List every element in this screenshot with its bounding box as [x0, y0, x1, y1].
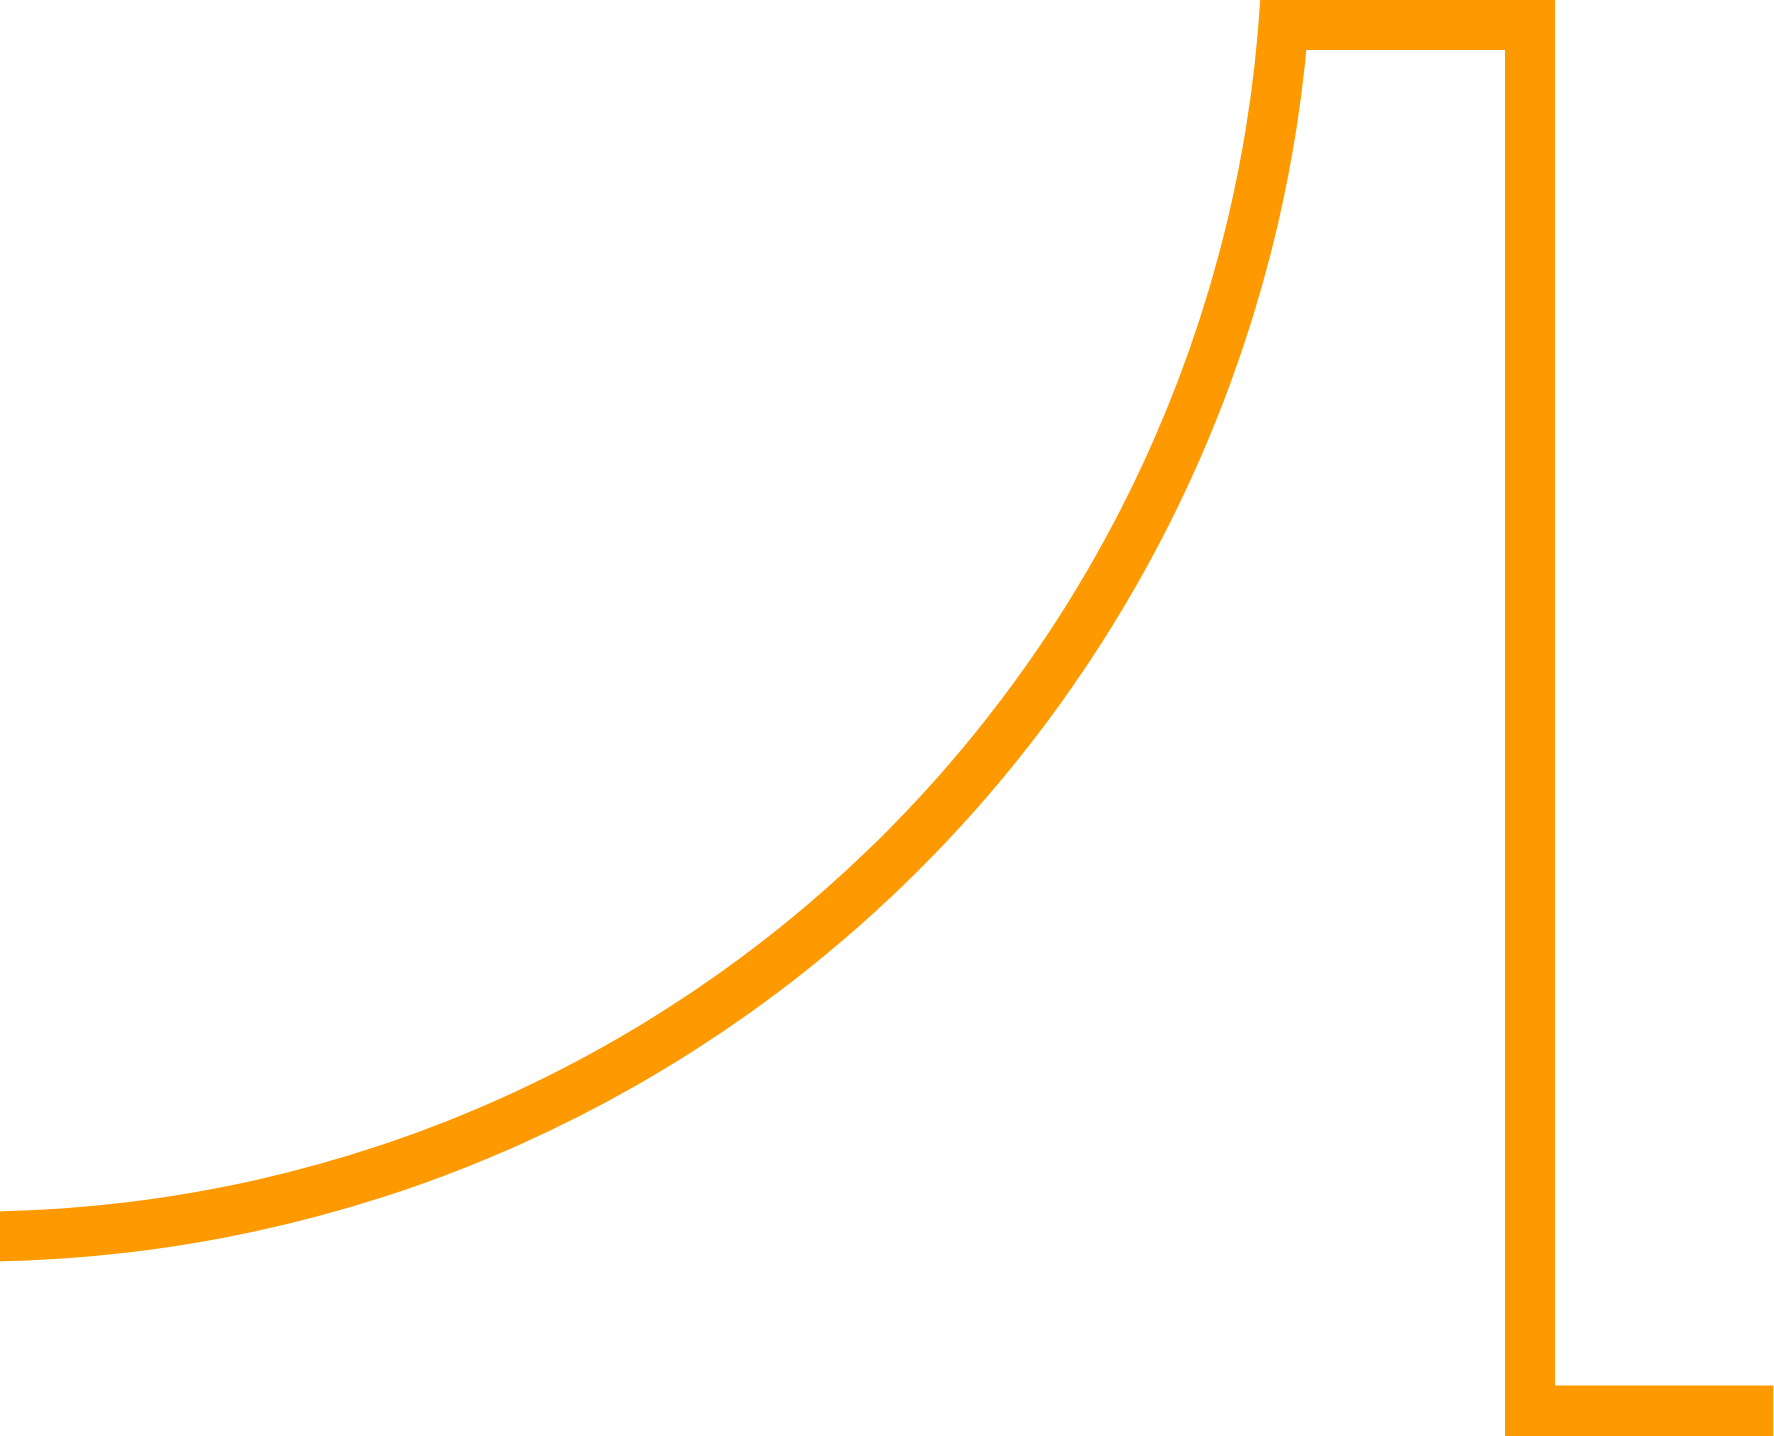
bottom horizontal bar — [1505, 1386, 1773, 1436]
top horizontal bar — [1280, 0, 1555, 50]
curve: arc rising from left edge to top — [0, 0, 1286, 1236]
right vertical bar — [1505, 0, 1555, 1436]
